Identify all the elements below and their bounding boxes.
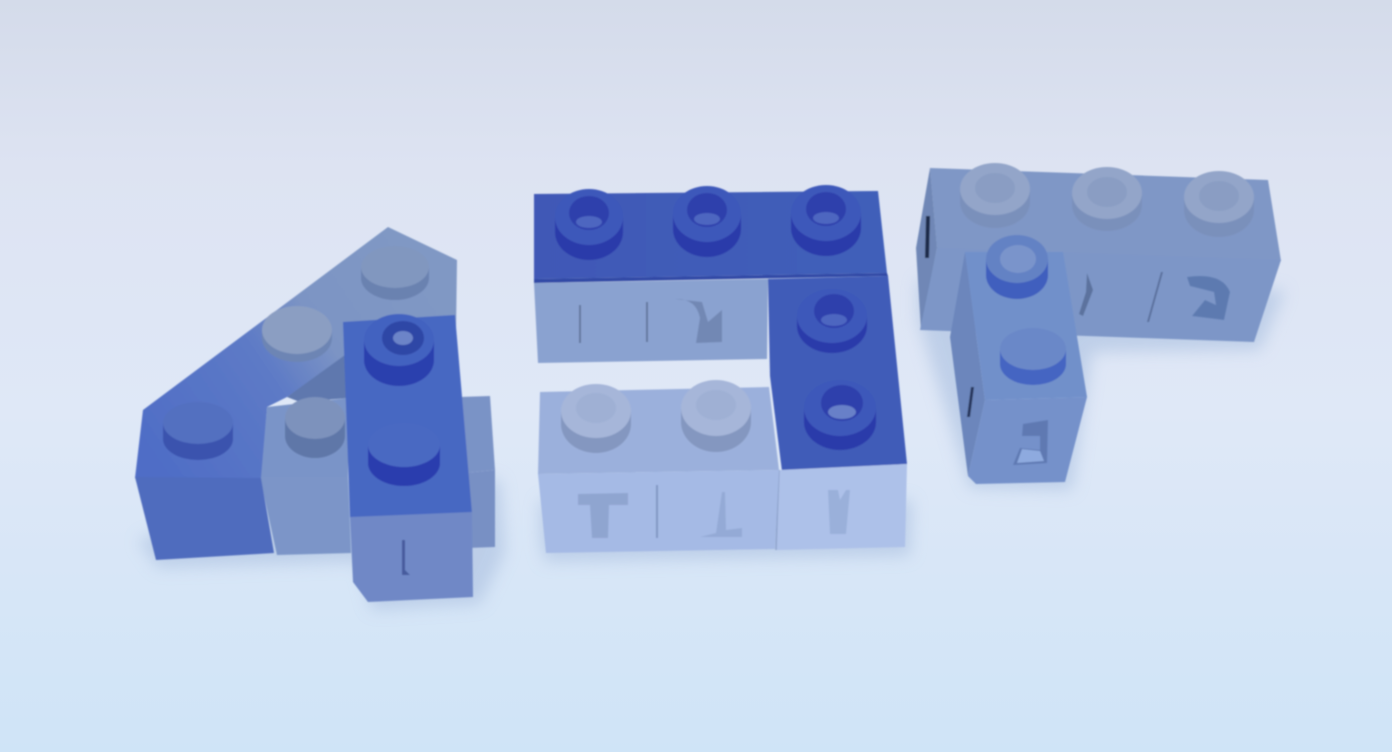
short brick left side xyxy=(950,252,985,476)
short brick top face xyxy=(965,252,1087,400)
digit 4: left brick assembly xyxy=(135,227,495,602)
long brick left side xyxy=(916,168,937,330)
far right stub brick xyxy=(460,396,495,548)
stud 4 xyxy=(986,235,1048,299)
middle light brick xyxy=(260,398,351,555)
studs: upper row xyxy=(555,185,861,260)
stud 2 xyxy=(673,186,741,257)
front brick top face xyxy=(343,315,472,518)
stud 7 xyxy=(681,380,751,452)
front brick front face xyxy=(350,512,473,602)
stud 5 xyxy=(804,380,876,450)
stud: wedge right xyxy=(361,246,429,300)
stamp marks: 1 | 2 xyxy=(1079,272,1230,322)
wedge front face xyxy=(135,477,274,560)
stamp marks xyxy=(578,485,742,538)
slanted wedge brick top xyxy=(135,227,457,478)
long brick top face xyxy=(930,168,1281,261)
stud: wedge left xyxy=(163,402,233,460)
stud: front brick bottom xyxy=(368,423,440,486)
stud 3 xyxy=(791,185,861,256)
lower light brick top face xyxy=(538,387,779,474)
stud 1 xyxy=(960,163,1030,228)
long brick front face xyxy=(920,248,1281,342)
studs: right brick xyxy=(797,289,876,450)
stamp marks: 1 | 2 xyxy=(579,299,722,343)
shadows under bricks xyxy=(138,280,1285,610)
upper dark brick top face xyxy=(534,191,888,283)
digit 7: right brick assembly xyxy=(916,163,1281,484)
studs: short brick xyxy=(986,235,1066,385)
right dark brick top face xyxy=(768,276,907,471)
right brick front face xyxy=(776,464,907,550)
stamp mark: S xyxy=(1013,420,1048,465)
digit 5: centre brick assembly xyxy=(534,185,907,553)
stud 5 xyxy=(1000,328,1066,385)
lower light brick front face xyxy=(538,470,779,553)
seam between lower brick and right brick xyxy=(776,470,779,550)
stud 6 xyxy=(561,384,631,453)
wedge inner shadow face xyxy=(287,352,348,402)
short brick front face xyxy=(967,387,1087,484)
stud 2 xyxy=(1072,167,1142,231)
stud 4 xyxy=(797,289,867,353)
studs: lower light brick xyxy=(561,380,751,453)
studs: long brick xyxy=(960,163,1254,237)
stud: middle brick xyxy=(285,397,345,458)
stud 1 xyxy=(555,189,623,260)
stud: front brick top xyxy=(364,314,434,386)
stud 3 xyxy=(1184,171,1254,237)
stud: wedge middle xyxy=(262,306,332,362)
stamp mark: 1 xyxy=(828,490,850,534)
upper light brick front face xyxy=(534,279,768,363)
